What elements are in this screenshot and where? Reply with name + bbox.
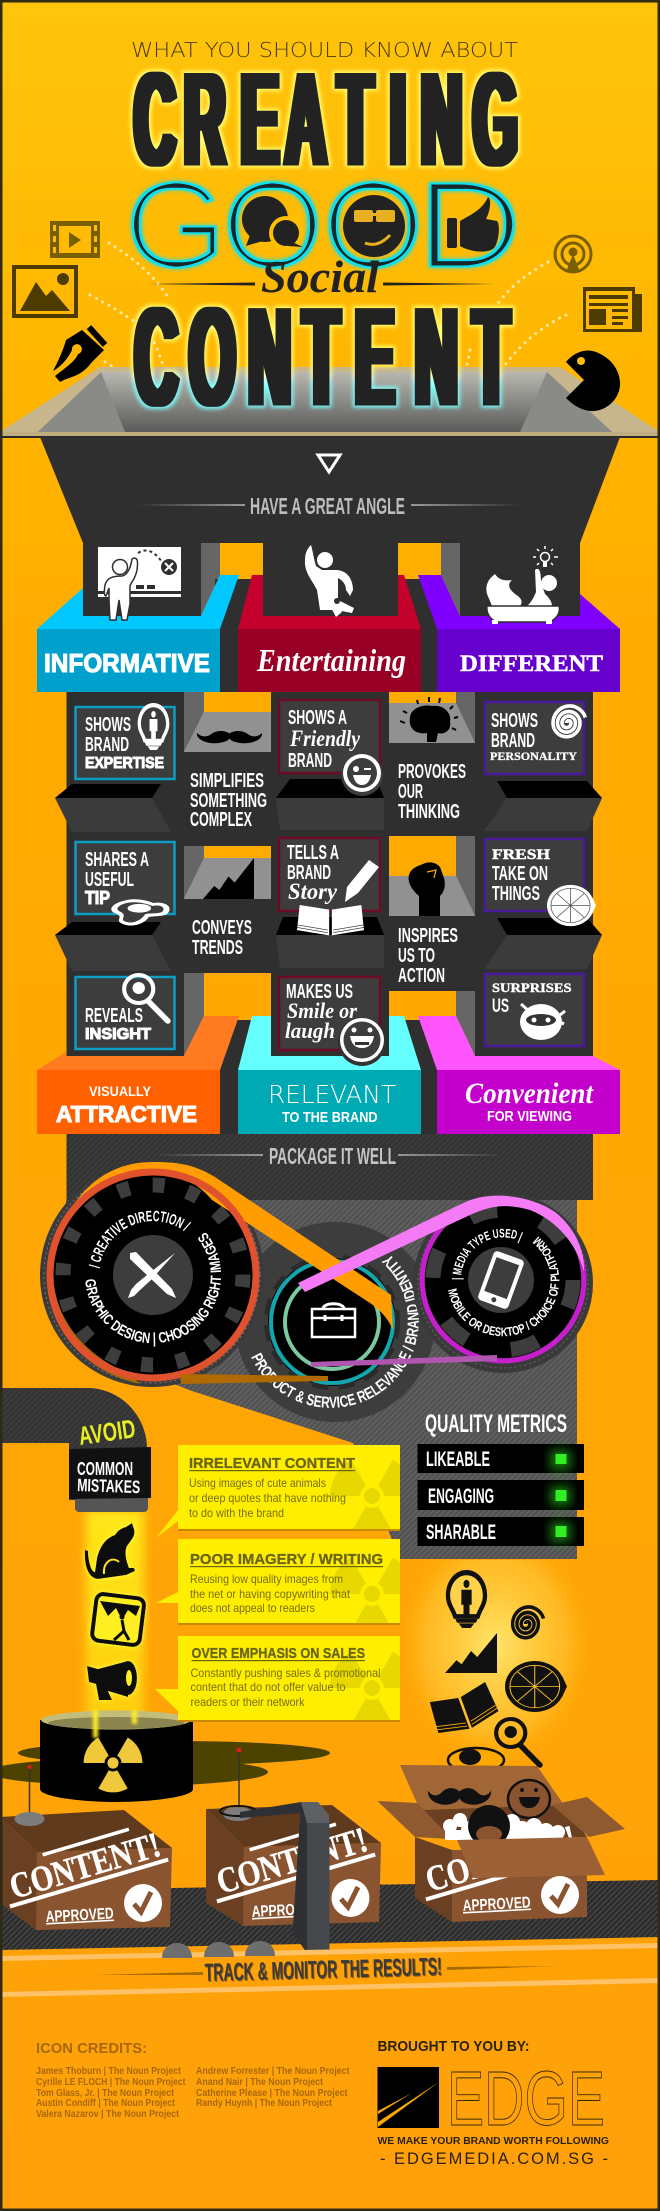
gear: left (40, 1172, 262, 1387)
box: open content box (378, 1765, 625, 1922)
label: entertaining: Entertaining (256, 642, 406, 678)
icon: newspaper (583, 287, 642, 332)
gear: right (413, 1193, 593, 1373)
card: shows brand expertise (76, 703, 174, 779)
icon: bath with lightbulb (486, 546, 559, 624)
panel: provokes: THINKING (398, 801, 460, 823)
conveyor belt (0, 1880, 660, 1950)
panel: package it well (66, 1134, 593, 1200)
panel: conveys trends: TRENDS (192, 937, 243, 959)
brand block: WE MAKE YOUR BRAND WORTH FOLLOWING (378, 2136, 609, 2147)
card: reveals insight: REVEALS (85, 1005, 143, 1027)
panel: inspires: INSPIRES (398, 925, 458, 947)
icon: triangle (318, 455, 340, 472)
card: fresh take: FRESH (492, 847, 550, 863)
panel: poor imagery: the net or having copywriting that (190, 1587, 351, 1601)
card: useful tip: TIP (85, 888, 110, 908)
card: shows brand expertise: SHOWS (85, 714, 131, 736)
icon: pen nib (53, 325, 107, 382)
icon: mustache (428, 1788, 491, 1805)
icon: phone (477, 1250, 525, 1310)
funnel side strips (201, 543, 460, 616)
card: fresh take (485, 839, 596, 926)
panel: provokes (398, 697, 466, 823)
scanner pillar (292, 1802, 330, 1953)
column dark bars top (215, 579, 440, 692)
title: good dark core: D (415, 156, 524, 295)
panel: conveys trends: CONVEYS (192, 917, 252, 939)
panel: entertaining ribbon (238, 575, 421, 692)
icon: broadcast (555, 236, 591, 272)
panel: quality metrics: QUALITY METRICS (425, 1410, 567, 1438)
icon: watermark (330, 1652, 400, 1720)
icon credits: Austin Condiff | The Noun Project (36, 2098, 176, 2109)
title kicker: WHAT YOU SHOULD KNOW ABOUT (131, 38, 519, 62)
icon: book (427, 1681, 501, 1739)
gear text: MOBILE OR DESKTOP / CHOICE OF PLATFORM (448, 1236, 560, 1336)
panel: inspires: US TO (398, 945, 435, 967)
dome (14, 1812, 44, 1826)
icon: lemon (505, 1661, 567, 1712)
icon: lemon (547, 885, 596, 926)
card: reveals insight (76, 975, 174, 1049)
heading: package it well: PACKAGE IT WELL (269, 1143, 396, 1169)
panel: convenient ribbon: Convenient (465, 1077, 594, 1110)
stripes (0, 1943, 660, 1997)
shadows (0, 1741, 330, 1786)
panel: irrelevant content (156, 1445, 419, 1538)
card: reveals insight: INSIGHT (85, 1026, 151, 1043)
falling icons (427, 1570, 567, 1772)
box: content 1 (0, 1810, 172, 1930)
barrel (40, 1710, 193, 1802)
card: smile or laugh (279, 977, 380, 1050)
brand block (378, 2038, 609, 2168)
panel: inspires: ACTION (398, 965, 445, 987)
panel: visually attractive ribbon: ATTRACTIVE (56, 1101, 197, 1127)
panel: inspires (398, 862, 458, 987)
panel: provokes: PROVOKES (398, 761, 466, 783)
panel: over emphasis on sales: Constantly pushing sales & promotional (190, 1666, 380, 1680)
icon: magnifier (124, 975, 168, 1021)
belt: pink (298, 1196, 584, 1292)
card: surprises: SURPRISES (492, 981, 572, 995)
panel: over emphasis on sales (155, 1636, 400, 1722)
icon credits: Randy Huynh | The Noun Project (196, 2098, 333, 2109)
label: informative: INFORMATIVE (44, 648, 210, 678)
gear: middle (238, 1222, 434, 1422)
icon: check (332, 1879, 370, 1917)
icon: watermark (330, 1460, 400, 1529)
gear text: / CREATIVE DIRECTION / (88, 1210, 192, 1268)
box label: CONTENT! (5, 1824, 165, 1907)
dotted lines into hopper (90, 243, 566, 427)
icon: megaphone (87, 1661, 137, 1700)
card: brand personality (485, 702, 585, 774)
panel: relevant ribbon: TO THE BRAND (282, 1109, 378, 1126)
glow behind falling icons (412, 1560, 578, 1750)
icon: entertainer (305, 545, 354, 617)
panel: funnel (40, 437, 620, 616)
ring: red (50, 1172, 256, 1378)
scanner arm (240, 1802, 301, 1818)
icon: ninja (468, 1805, 510, 1847)
card: friendly brand: Friendly (289, 726, 361, 751)
column dark bars bottom (215, 1020, 440, 1134)
heading: have a great angle: HAVE A GREAT ANGLE (250, 493, 405, 519)
card: surprises (485, 974, 584, 1046)
card: smile or laugh: Smile or (287, 998, 357, 1023)
icon: pacman (566, 350, 620, 411)
icon: thumbs up (447, 197, 499, 252)
icon: winking smiley (341, 754, 383, 796)
panel: simplifies: SOMETHING (190, 790, 267, 812)
icon: egg (111, 899, 170, 926)
panel: visually attractive ribbon (37, 1016, 239, 1134)
box: content 2 (205, 1805, 381, 1926)
icon: briefcase (312, 1304, 355, 1337)
belt: orange crescent (48, 1285, 140, 1384)
label: different: DIFFERENT (460, 651, 603, 676)
front flap (457, 1837, 605, 1878)
card: useful tip: USEFUL (85, 869, 134, 891)
panel: convenient ribbon (418, 1016, 620, 1134)
card: smile or laugh: MAKES US (286, 981, 353, 1003)
card: brand personality: SHOWS (491, 710, 538, 732)
indicator lights glow (550, 1450, 571, 1542)
panel: irrelevant content: IRRELEVANT CONTENT (189, 1455, 355, 1472)
logo wordmark: EDGE (447, 2056, 605, 2142)
icon: image frame (12, 265, 78, 318)
panel: provokes: OUR (398, 781, 423, 803)
panel: conveys trends (192, 858, 254, 959)
brand block: - EDGEMEDIA.COM.SG - (380, 2150, 608, 2168)
brand block: BROUGHT TO YOU BY: (378, 2038, 530, 2055)
icon: speech bubbles (242, 196, 303, 250)
gap fills / panels: content grid (66, 692, 593, 1056)
icon credits: Andrew Forrester | The Noun Project (196, 2066, 350, 2077)
card: surprises: US (492, 996, 509, 1017)
icon: crossed pen and brush (128, 1252, 176, 1298)
card: shows brand expertise: EXPERTISE (85, 755, 164, 772)
icon: bulb (446, 1570, 487, 1628)
panel: poor imagery: POOR IMAGERY / WRITING (190, 1551, 383, 1568)
icon: film (50, 221, 100, 258)
icon credits: Cyrille LE FLOCH | The Noun Project (36, 2077, 186, 2088)
card: friendly brand (279, 700, 383, 796)
poles (30, 1750, 239, 1812)
panel: quality metrics: LIKEABLE (426, 1448, 490, 1471)
card: useful tip (76, 842, 174, 926)
panel: poor imagery (156, 1539, 400, 1625)
title: divider lines (147, 282, 495, 286)
title: creating glow: CREATING (134, 44, 517, 194)
title: content: CONTENT (135, 279, 509, 435)
card: brand personality: BRAND (491, 730, 535, 752)
label: approved: APPROVED (462, 1894, 531, 1915)
card: fresh take: THINGS (492, 883, 540, 905)
panel: different ribbon (418, 575, 620, 692)
icon: brain (400, 697, 458, 742)
card: brand story: TELLS A (287, 842, 339, 864)
icon: egg (448, 1748, 504, 1772)
hopper top (0, 367, 660, 438)
title: creating: CREATING (134, 44, 517, 194)
card: brand story (279, 838, 380, 935)
panel: avoid pipe (0, 1388, 147, 1500)
box label: CONTENT! (421, 1817, 581, 1900)
card: brand personality: PERSONALITY (490, 749, 577, 763)
glow beam (86, 1510, 144, 1722)
panel: poor imagery: does not appeal to readers (190, 1601, 315, 1615)
icon credits: Tom Glass, Jr. | The Noun Project (36, 2088, 175, 2099)
icon: laughing face (338, 1018, 386, 1066)
card: brand story: BRAND (287, 862, 331, 884)
title: good cyan: GOO (123, 155, 426, 295)
gear text: PRODUCT & SERVICE RELEVANCE / BRAND IDENTITY (251, 1256, 419, 1408)
panel: informative ribbon (37, 575, 239, 692)
icon: fist (409, 862, 445, 916)
panel: visually attractive ribbon: VISUALLY (89, 1083, 152, 1099)
box label: CONTENT! (212, 1819, 372, 1902)
icon: spiral (553, 706, 585, 737)
belt: orange lower (181, 1374, 328, 1384)
panel: over emphasis on sales: OVER EMPHASIS ON SALES (192, 1645, 365, 1662)
card: brand story: Story (288, 879, 338, 904)
panel: relevant ribbon: RELEVANT (268, 1080, 396, 1109)
panel: simplifies: SIMPLIFIES (190, 770, 264, 792)
panel: simplifies: COMPLEX (190, 809, 252, 831)
panel: common mistakes: COMMON (77, 1459, 133, 1479)
label: avoid: AVOID (77, 1413, 137, 1451)
heading: track and monitor: TRACK & MONITOR THE RESULTS! (204, 1953, 442, 1987)
icon: sunglasses smiley (343, 195, 405, 257)
packing peanuts (443, 1813, 565, 1840)
panel: over emphasis on sales: content that do not offer value to (190, 1680, 346, 1694)
pole pins (28, 1748, 242, 1769)
icon credits: James Thoburn | The Noun Project (36, 2066, 182, 2077)
indicator lights (556, 1454, 566, 1537)
heading: track and monitor (97, 1953, 556, 1988)
title: content glow: CONTENT (135, 279, 509, 435)
panel: common mistakes: MISTAKES (77, 1475, 141, 1497)
icon: laughing face (508, 1780, 550, 1818)
card: useful tip: SHARES A (85, 849, 149, 871)
panel: convenient ribbon: FOR VIEWING (487, 1108, 572, 1125)
card: friendly brand: SHOWS A (288, 707, 347, 729)
icon: check (124, 1884, 162, 1922)
icon credits: ICON CREDITS: (36, 2040, 147, 2057)
panel: over emphasis on sales: readers or their network (190, 1695, 305, 1709)
icon: chart (203, 858, 254, 899)
panel: irrelevant content: or deep quotes that have nothing (189, 1491, 346, 1505)
panel: common mistakes (69, 1447, 151, 1512)
icon: magnifier (496, 1719, 540, 1765)
icon credits (36, 2040, 350, 2120)
gear text: GRAPHIC DESIGN | CHOOSING RIGHT IMAGES (85, 1232, 221, 1347)
card: shows brand expertise: BRAND (85, 734, 129, 756)
card: smile or laugh: laugh (285, 1018, 335, 1043)
label: approved: APPROVED (251, 1900, 320, 1921)
panel: poor imagery: Reusing low quality images from (190, 1572, 343, 1586)
icon: cliff sign (91, 1593, 145, 1646)
dome with ring (220, 1806, 256, 1821)
icon: mustache (197, 731, 262, 743)
belt: pink lower (311, 1355, 497, 1367)
panel: irrelevant content: Using images of cute animals (189, 1476, 326, 1490)
card: fresh take: TAKE ON (492, 863, 548, 885)
panel: package gears background (66, 1200, 577, 1559)
icon: chart (445, 1633, 497, 1673)
gear text: | MEDIA TYPE USED | (452, 1228, 523, 1280)
icon credits: Catherine Please | The Noun Project (196, 2088, 348, 2099)
icon: spiral (513, 1607, 544, 1638)
icon: teacher (98, 547, 181, 620)
icon: bulb (138, 703, 169, 750)
icon: check (541, 1876, 579, 1914)
drips (93, 1710, 137, 1738)
icon: cat (85, 1523, 135, 1579)
icon: radiation (80, 1736, 146, 1792)
title: good cyan: D (415, 156, 524, 295)
icon: ninja (520, 1004, 565, 1040)
panel: quality metrics: SHARABLE (426, 1521, 496, 1544)
title: good dark core: GOO (123, 155, 426, 295)
icon: watermark (330, 1558, 400, 1623)
card: friendly brand: BRAND (288, 750, 332, 772)
logo mark (378, 2067, 439, 2128)
panel: irrelevant content: to do with the brand (189, 1506, 284, 1520)
panel: simplifies (190, 731, 267, 831)
title: social: Social (261, 251, 379, 302)
heading: track and monitor: TRACK & MONITOR THE RESULTS! (205, 1954, 443, 1988)
belt: orange (63, 1162, 393, 1330)
icon: pencil (345, 860, 379, 902)
label: approved: APPROVED (45, 1905, 114, 1926)
panel: quality metrics (418, 1410, 584, 1546)
icon credits: Anand Nair | The Noun Project (196, 2077, 324, 2088)
icon credits: Valera Nazarov | The Noun Project (36, 2109, 180, 2120)
panel: relevant ribbon (238, 1016, 421, 1134)
domes (162, 1941, 275, 1958)
fold shapes (55, 779, 602, 971)
icon: open book (297, 905, 364, 935)
panel: quality metrics: ENGAGING (428, 1485, 494, 1508)
